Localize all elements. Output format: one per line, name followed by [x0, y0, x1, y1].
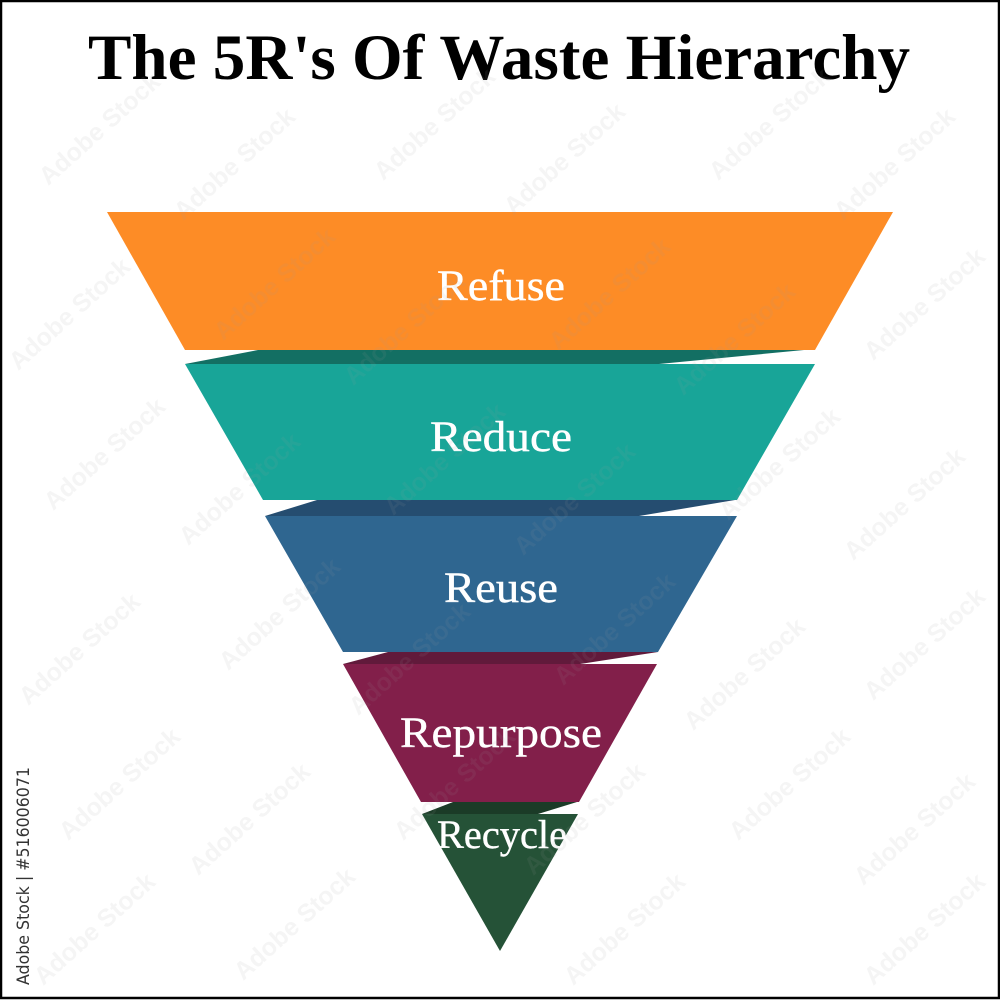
stock watermark pattern: Adobe Stock	[229, 862, 361, 986]
stock watermark pattern: Adobe Stock	[389, 722, 521, 846]
stock watermark pattern: Adobe Stock	[509, 437, 641, 561]
stock watermark pattern: Adobe Stock	[174, 427, 306, 551]
panel: reuse layer	[265, 500, 737, 652]
stock watermark pattern: Adobe Stock	[724, 722, 856, 846]
stock watermark pattern: Adobe Stock	[214, 552, 346, 676]
panel: recycle layer: Recycle	[437, 812, 567, 857]
stock watermark pattern: Adobe Stock	[859, 582, 991, 706]
stock watermark pattern: Adobe Stock	[14, 587, 146, 711]
stock watermark pattern: Adobe Stock	[859, 867, 991, 991]
stock watermark pattern: Adobe Stock	[169, 102, 301, 226]
title: The 5R's Of Waste Hierarchy	[88, 22, 910, 94]
stock watermark pattern: Adobe Stock	[369, 62, 501, 186]
panel: recycle layer	[422, 802, 578, 951]
panel: repurpose layer: Repurpose	[400, 710, 602, 757]
stock watermark pattern: Adobe Stock	[4, 252, 136, 376]
stock watermark pattern: Adobe Stock	[839, 442, 971, 566]
panel: reduce layer: Reduce	[430, 414, 572, 461]
stock watermark pattern: Adobe Stock	[34, 67, 166, 191]
stock watermark pattern: Adobe Stock	[339, 267, 471, 391]
stock watermark pattern: Adobe Stock	[184, 757, 316, 881]
stock watermark pattern: Adobe Stock	[679, 612, 811, 736]
stock watermark pattern: Adobe Stock	[209, 222, 341, 346]
stock watermark pattern: Adobe Stock	[704, 62, 836, 186]
stock watermark pattern: Adobe Stock	[544, 232, 676, 356]
panel: reduce layer	[185, 350, 815, 500]
panel: refuse layer	[107, 212, 893, 350]
stock watermark pattern: Adobe Stock	[519, 757, 651, 881]
panel: refuse layer: Refuse	[437, 263, 565, 310]
stock watermark pattern: Adobe Stock	[39, 392, 171, 516]
stock watermark pattern: Adobe Stock	[549, 567, 681, 691]
panel: reuse layer: Reuse	[444, 565, 558, 612]
stock watermark pattern: Adobe Stock	[669, 277, 801, 401]
stock watermark pattern: Adobe Stock	[859, 242, 991, 366]
panel: repurpose layer	[343, 652, 658, 802]
stock watermark pattern: Adobe Stock	[829, 102, 961, 226]
stock watermark pattern: Adobe Stock	[344, 597, 476, 721]
stock credit, vertical text: Adobe Stock | #516006071	[14, 767, 34, 985]
funnel diagram	[107, 212, 893, 951]
stock watermark pattern: Adobe Stock	[379, 397, 511, 521]
stock watermark pattern: Adobe Stock	[559, 867, 691, 991]
stock watermark pattern: Adobe Stock	[29, 867, 161, 991]
stock watermark pattern: Adobe Stock	[849, 767, 981, 891]
stock watermark pattern: Adobe Stock	[499, 97, 631, 221]
stock watermark pattern: Adobe Stock	[714, 402, 846, 526]
stock watermark pattern: Adobe Stock	[54, 722, 186, 846]
